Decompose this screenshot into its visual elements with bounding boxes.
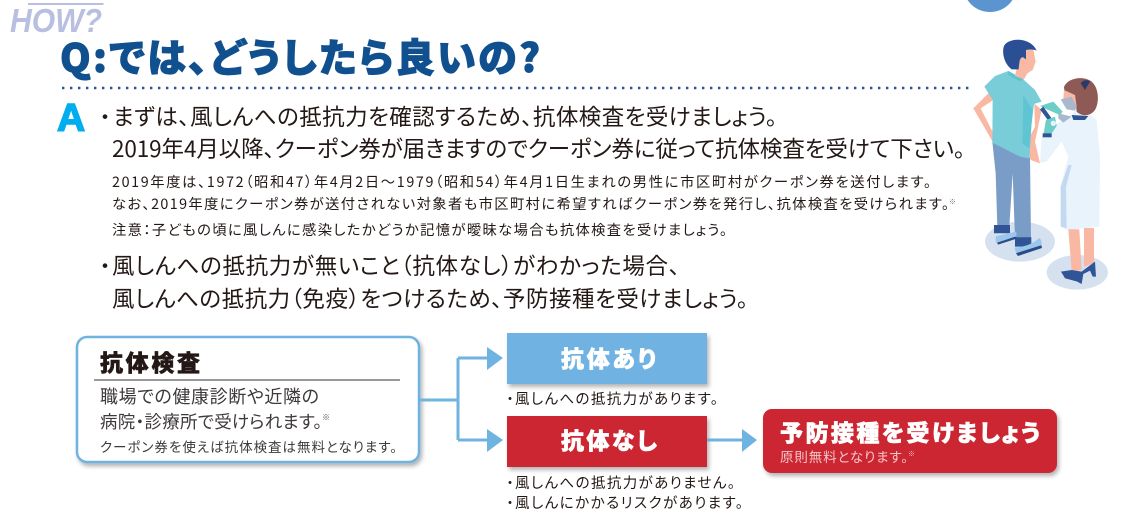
callout: get vaccinated <box>763 409 1057 473</box>
answer text block 1: 2019年4月以降、クーポン券が届きますのでクーポン券に従って抗体検査を受けて下さい。 <box>112 132 965 164</box>
note: antibody present: 風しんへの抵抗力があります。 <box>515 388 718 409</box>
note: no antibody: 風しんへの抵抗力がありません。 <box>515 472 735 493</box>
panel: antibody test: 職場での健康診断や近隣の <box>100 383 319 409</box>
panel: antibody test: 抗体検査 <box>100 344 200 378</box>
panel: antibody test <box>77 337 419 462</box>
answer text block 2: ・ <box>94 249 116 281</box>
illustration: doctor vaccinating a man <box>973 40 1108 290</box>
coupon details text: 2019年度は、1972（昭和47）年4月2日〜1979（昭和54）年4月1日生まれの男性に市区町村がクーポン券を送付します。 <box>112 171 931 192</box>
result box: antibody present: 抗体あり <box>561 340 656 374</box>
result box: antibody present <box>507 333 707 384</box>
note: no antibody: ・ <box>503 493 517 513</box>
note: no antibody: ・ <box>503 473 517 493</box>
panel: antibody test: ※ <box>322 412 330 423</box>
answer text block 1: まずは、風しんへの抵抗力を確認するため、抗体検査を受けましょう。 <box>113 100 777 132</box>
answer text block 2: 風しんへの抵抗力（免疫）をつけるため、予防接種を受けましょう。 <box>112 282 748 314</box>
note: antibody present: ・ <box>503 389 517 409</box>
result box: no antibody: 抗体なし <box>561 422 657 456</box>
callout: get vaccinated: ※ <box>908 449 915 459</box>
coupon details text <box>112 171 956 240</box>
note: no antibody: 風しんにかかるリスクがあります。 <box>515 492 743 513</box>
coupon details text: ※ <box>949 197 956 207</box>
panel: antibody test: クーポン券を使えば抗体検査は無料となります。 <box>100 436 397 456</box>
answer text block 1: ・ <box>94 100 116 132</box>
arrow: to vaccination <box>707 429 757 452</box>
answer text block 1 <box>94 100 965 164</box>
coupon details text: 注意：子どもの頃に風しんに感染したかどうか記憶が曖昧な場合も抗体検査を受けましょう。 <box>112 219 727 240</box>
callout: get vaccinated: 原則無料となります。 <box>780 446 908 466</box>
note: no antibody <box>503 472 743 513</box>
result box: no antibody <box>507 416 707 467</box>
arrow: branch to results <box>419 347 503 452</box>
coupon details text: なお、2019年度にクーポン券が送付されない対象者も市区町村に希望すればクーポン券を発行し、抗体検査を受けられます。 <box>112 193 949 214</box>
decorative circle top right <box>963 0 1017 12</box>
panel: antibody test: 病院・診療所で受けられます。 <box>100 409 322 434</box>
callout: get vaccinated: 予防接種を受けましょう <box>780 414 1040 448</box>
title: Q:では、どうしたら良いの? <box>60 28 540 84</box>
header tag: HOW?: HOW? <box>10 2 102 39</box>
answer text block 2: 風しんへの抵抗力が無いこと（抗体なし）がわかった場合、 <box>112 249 680 281</box>
answer text block 2 <box>94 249 748 314</box>
answer mark A: A <box>57 97 85 140</box>
